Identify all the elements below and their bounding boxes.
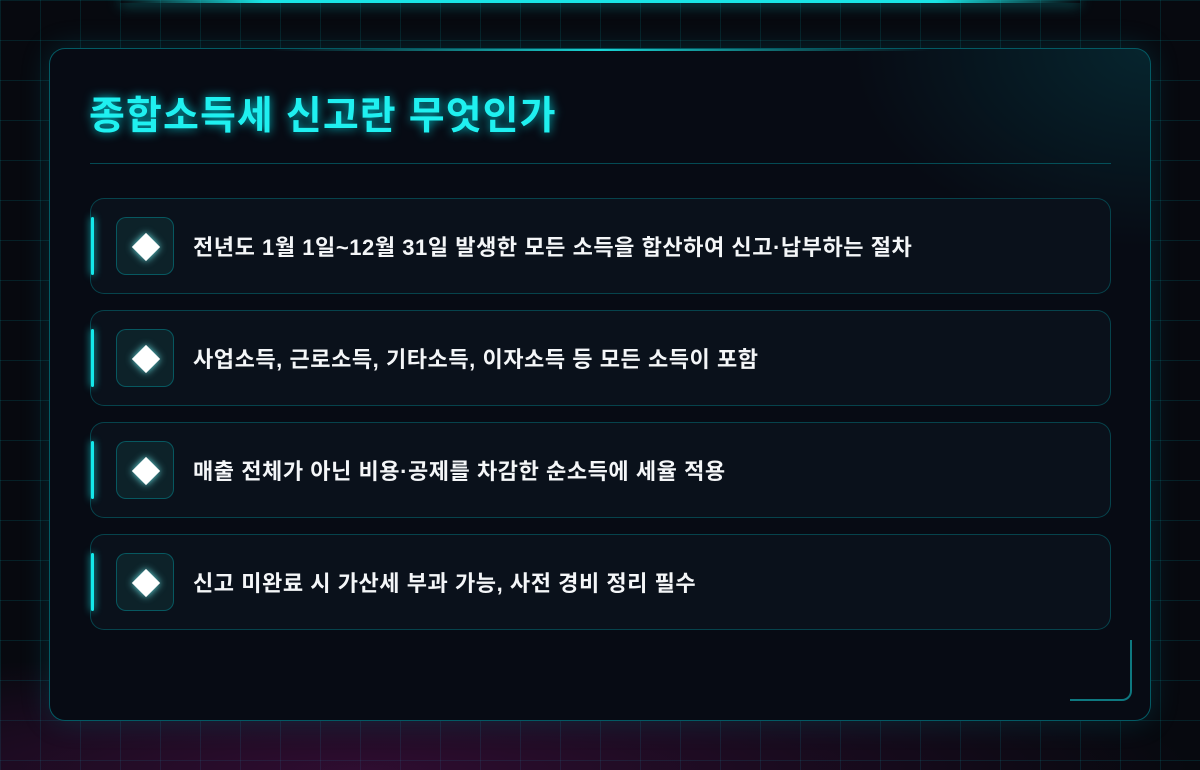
- item 1: 전년도 1월 1일~12월 31일 발생한 모든 소득을 합산하여 신고·납부하는 절차: [193, 235, 912, 260]
- corner bracket: [1070, 640, 1132, 701]
- item 2: 사업소득, 근로소득, 기타소득, 이자소득 등 모든 소득이 포함: [193, 347, 759, 372]
- item 3: 매출 전체가 아닌 비용·공제를 차감한 순소득에 세율 적용: [193, 459, 726, 484]
- item 1: [90, 198, 1111, 294]
- title: 종합소득세 신고란 무엇인가: [89, 95, 557, 138]
- item 3: [90, 422, 1111, 518]
- item 4: [90, 534, 1111, 630]
- item 2: [90, 310, 1111, 406]
- item 4: 신고 미완료 시 가산세 부과 가능, 사전 경비 정리 필수: [193, 571, 696, 596]
